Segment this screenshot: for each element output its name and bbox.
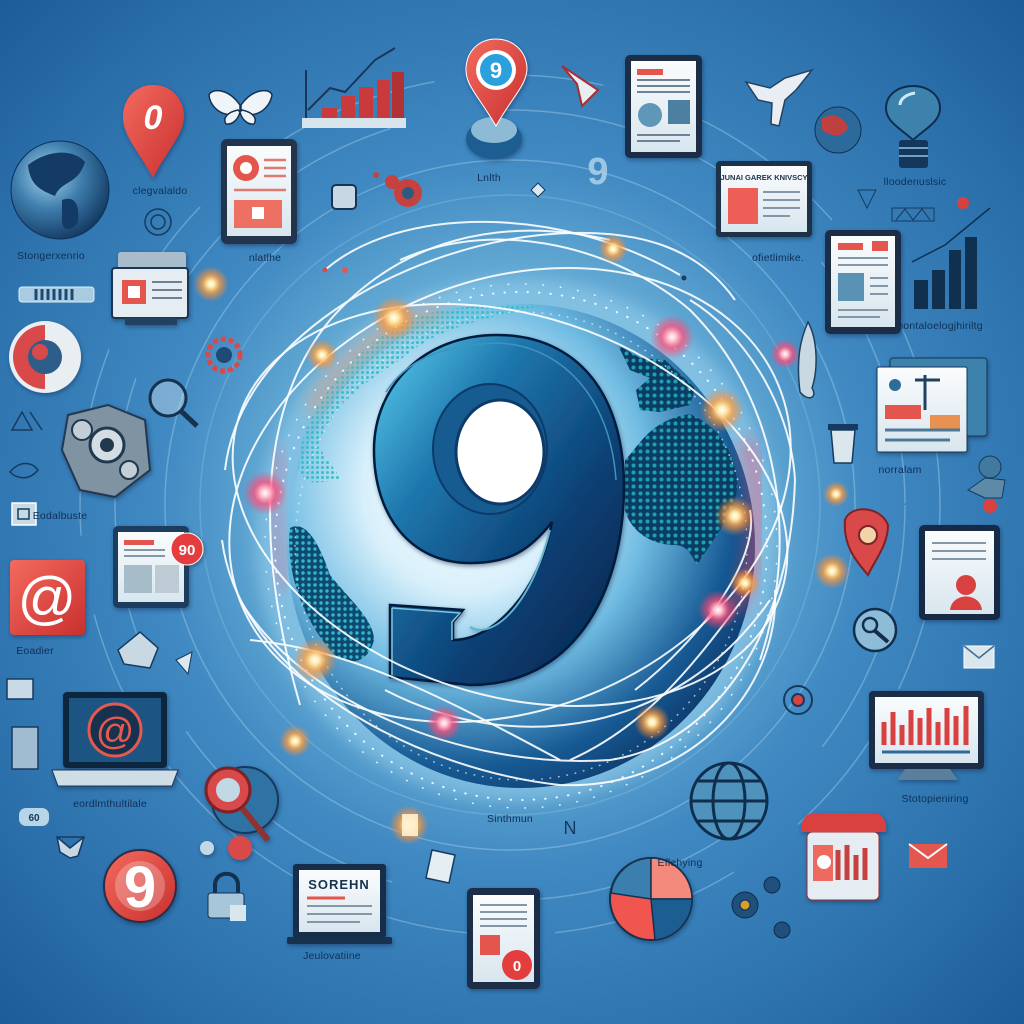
- icon: diamond: [531, 183, 545, 197]
- continent: right Africa: [625, 414, 737, 564]
- icon: small left glyphs: [10, 412, 42, 525]
- text labels: eordlmthultilale: [73, 798, 147, 810]
- icon: paper plane: [562, 66, 598, 106]
- icon: earth globe: [11, 141, 109, 239]
- icon: red lock cluster: [373, 172, 422, 207]
- icon: small red circles right: [858, 190, 969, 221]
- icon: red tag: [845, 509, 888, 575]
- icon: speech bubble: 60: [28, 813, 40, 824]
- icon: red nine badge: 9: [124, 855, 156, 920]
- text labels: norralam: [878, 464, 922, 476]
- text labels: nlatlhe: [249, 252, 281, 264]
- icon: right tablet: [825, 230, 901, 334]
- number nine counter ring: [433, 384, 547, 514]
- text labels: lloodenuslsic: [884, 176, 946, 188]
- icon: at sign card: @: [18, 566, 76, 631]
- icon: small person: [968, 456, 1005, 513]
- glowing nodes: [193, 234, 850, 757]
- icon: right article window: [716, 161, 812, 237]
- icon: envelope left: [57, 837, 84, 858]
- icon: envelope right: [964, 646, 994, 668]
- icon: airplane: [746, 70, 812, 126]
- icon: top location pin: 9: [490, 58, 502, 83]
- icon: note page: [426, 850, 455, 883]
- icon: left tablet: [221, 139, 297, 244]
- icon: bottom tablet with badge: 0: [513, 958, 521, 975]
- icon: red nine badge: [104, 850, 176, 922]
- icon: top tablet: [625, 55, 702, 158]
- icon: right article window: JUNAI GAREK KNIVSCY: [720, 173, 808, 182]
- letter N glyph: N: [564, 818, 576, 838]
- icon: house glyph: [118, 632, 158, 668]
- rim speckles: [265, 284, 777, 808]
- icon: left red pin: [123, 85, 184, 178]
- icon: red search cluster: [200, 767, 278, 860]
- icon: circle seal: [784, 686, 812, 714]
- number nine tail bevel: [392, 608, 460, 675]
- text labels: ofietlimike.: [752, 252, 804, 264]
- rim colour glow: [310, 310, 440, 410]
- text labels: Sinthmun: [487, 813, 533, 825]
- globe with continents: [256, 278, 780, 808]
- icon: feather pen: [798, 322, 816, 398]
- icon: magnifier disc: [854, 609, 896, 651]
- icon: small globe: [815, 107, 861, 153]
- text labels: Lnlth: [477, 172, 501, 184]
- icon: padlock: [208, 874, 246, 921]
- icon: light bulb: [886, 86, 940, 168]
- icon: folded paper: [176, 652, 192, 674]
- icon: target mark: [145, 209, 171, 235]
- icon: at sign card: [10, 560, 85, 635]
- text labels: Eodalbuste: [33, 510, 87, 522]
- icon: profile tablet: [919, 525, 1000, 620]
- chart: top bar chart: [302, 48, 406, 128]
- icon: speech bubble: [19, 808, 49, 826]
- continent: upper left dotted land: [298, 305, 540, 482]
- icon: calendar with chart: [801, 813, 886, 900]
- chart: pie chart: [610, 858, 692, 940]
- text labels: Stotopieniring: [901, 793, 969, 805]
- icon: search laptop: SOREHN: [308, 877, 370, 892]
- icon: laptop with at sign: @: [96, 711, 134, 753]
- icon: bottom tablet with badge: [467, 888, 540, 989]
- big number nine: [374, 335, 624, 685]
- text labels: Eoadier: [16, 645, 54, 657]
- icon: butterfly: [209, 91, 272, 124]
- icon: red envelope: [909, 844, 947, 868]
- continent: lower left dotted land: [289, 526, 374, 661]
- text labels: hontaloelogjhiriltg: [897, 320, 983, 332]
- icon: gear: [208, 339, 240, 371]
- chart: right bar chart: [912, 208, 990, 309]
- text labels: clegvalaldo: [133, 185, 187, 197]
- icon: gear cluster: [732, 877, 790, 938]
- icon: left documents stack: [112, 252, 188, 325]
- text labels: [16, 172, 983, 962]
- icon: article with 90 badge: 90: [179, 542, 195, 559]
- icon: red and blue disc: [9, 321, 81, 393]
- icon: wire globe: [691, 763, 767, 839]
- icon: top location pin: [466, 39, 527, 159]
- icon: magnifier: [150, 380, 197, 426]
- icon: bin: [828, 424, 858, 463]
- icon: search laptop: [287, 864, 392, 944]
- icon: gears block: [62, 405, 150, 497]
- text labels: Jeulovatiine: [303, 950, 361, 962]
- text labels: Stongerxenrio: [17, 250, 85, 262]
- icon: barcode strip: [19, 287, 94, 302]
- icon: left red pin: 0: [144, 99, 163, 137]
- icon: bar chart monitor: [869, 691, 984, 780]
- icon: small number nine: 9: [587, 151, 609, 193]
- icon: dashboard windows: [877, 358, 987, 452]
- icon: small left documents: [7, 679, 38, 769]
- number nine counter: [456, 400, 544, 504]
- text labels: Eflehying: [658, 857, 702, 869]
- concentric background rings: [80, 75, 940, 935]
- continent: upper right Europe: [618, 345, 695, 412]
- icon: article with 90 badge: [113, 526, 203, 608]
- icon: laptop with at sign: [52, 692, 178, 786]
- icon: glowing note: [389, 805, 429, 845]
- orbit lines: [161, 187, 859, 803]
- icon: small square: [332, 185, 356, 209]
